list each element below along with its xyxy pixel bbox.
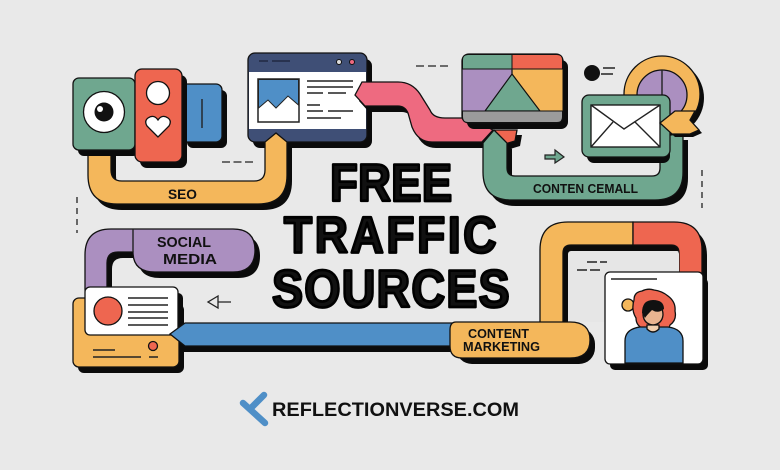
icon: envelope card bbox=[582, 95, 670, 163]
dashes bbox=[76, 197, 78, 233]
dashes bbox=[701, 170, 703, 208]
title: TRAFFIC bbox=[284, 207, 496, 264]
icon: logo chevron bbox=[243, 395, 265, 423]
logo bbox=[243, 395, 519, 423]
icon: small left arrow bbox=[208, 296, 231, 308]
panel: content marketing pipe bbox=[540, 222, 707, 331]
icon: dot with lines bbox=[584, 65, 615, 81]
panel: social media pipe and pill: MEDIA bbox=[163, 251, 217, 268]
panel: social media pipe and pill bbox=[85, 229, 260, 296]
arrow: yellow pointer bbox=[660, 111, 702, 137]
arrow: SEO pipe bbox=[88, 133, 292, 210]
dashes bbox=[416, 65, 448, 67]
icon: red like card bbox=[135, 69, 187, 168]
icon: chart block bbox=[462, 54, 568, 129]
title bbox=[272, 154, 510, 319]
icon: donut chart bbox=[624, 56, 704, 136]
icon: green eye card bbox=[73, 78, 139, 156]
title: SOURCES bbox=[272, 259, 510, 319]
label pill: content marketing bbox=[450, 322, 595, 364]
icon: person portrait card bbox=[605, 272, 708, 370]
logo text: REFLECTIONVERSE.COM bbox=[272, 400, 519, 421]
label: SEO: SEO bbox=[168, 186, 197, 202]
icon: browser window bbox=[248, 53, 372, 148]
title: FREE bbox=[330, 154, 452, 213]
icon: social blue card bbox=[178, 84, 227, 148]
label: contencemall: CONTEN CEMALL bbox=[533, 181, 638, 196]
dashes bbox=[222, 161, 253, 163]
icon: profile card on yellow box bbox=[73, 287, 184, 373]
arrow: blue pipe bbox=[170, 323, 460, 352]
arrow: pink pipe bbox=[355, 82, 497, 148]
label pill: content marketing: CONTENT bbox=[468, 327, 529, 341]
icon: back window bbox=[568, 251, 679, 322]
icon: small right arrow bbox=[545, 150, 564, 163]
label: social media: SOCIAL bbox=[157, 234, 211, 251]
arrow: green email pipe bbox=[483, 130, 688, 206]
label pill: content marketing: MARKETING bbox=[463, 340, 540, 354]
